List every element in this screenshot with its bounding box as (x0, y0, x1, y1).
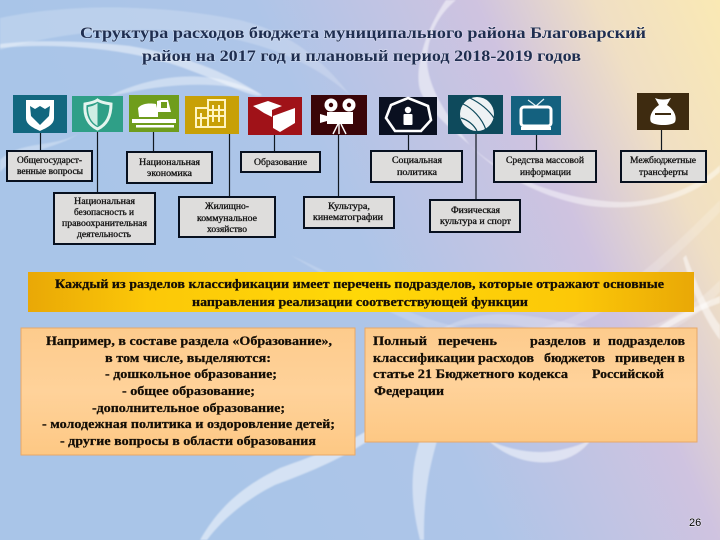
icon: film camera (311, 95, 367, 135)
panel: budget code reference: разделов (530, 334, 586, 348)
label: housing: коммунальное (197, 213, 257, 223)
icon: combine harvester (129, 95, 179, 132)
label: national economy: экономика (147, 168, 192, 178)
panel: education example: в том числе, выделяются: (105, 351, 271, 365)
label: sport: Физическая (451, 205, 500, 215)
connector lines (40, 130, 662, 199)
icon: emblem (13, 95, 67, 133)
panel: budget code reference (365, 328, 697, 442)
label: mass media (494, 151, 596, 182)
panel: budget code reference: перечень (438, 334, 497, 348)
label: national economy (127, 152, 212, 183)
label: education (241, 152, 320, 172)
label: sport: культура и спорт (440, 216, 511, 226)
label: housing: хозяйство (207, 224, 248, 234)
title: Структура расходов бюджета муниципального района Благоварский (80, 25, 646, 42)
panel: education example: - другие вопросы в области образования (60, 434, 316, 448)
icon: shield (72, 96, 123, 132)
panel: education example: -дополнительное образование; (92, 401, 285, 415)
label: interbudget transfers: трансферты (639, 167, 688, 177)
label: culture: кинематографии (313, 212, 383, 222)
label: national security: безопасность и (74, 207, 134, 217)
panel: budget code reference: в (678, 351, 685, 365)
label: education: Образование (254, 157, 307, 167)
label: culture (304, 197, 394, 228)
panel: budget code reference: Федерации (374, 384, 444, 398)
panel: budget code reference: статье 21 Бюджетного кодекса (373, 367, 569, 381)
label: interbudget transfers: Межбюджетные (630, 155, 696, 165)
panel: budget code reference: расходов (478, 351, 534, 365)
icon: television (511, 96, 561, 135)
icon: money bag (637, 93, 689, 130)
title (80, 25, 646, 65)
panel: budget code reference: приведен (615, 351, 675, 365)
label: national economy: Национальная (139, 157, 200, 167)
label: social policy: Социальная (392, 155, 442, 165)
label: social policy: политика (397, 167, 437, 177)
panel: education example: - молодежная политика и оздоровление детей; (42, 417, 335, 431)
label: general state issues (7, 151, 92, 181)
callout banner: Каждый из разделов классификации имеет перечень подразделов, которые отражают основные (55, 277, 665, 291)
title: район на 2017 год и плановый период 2018-2019 годов (142, 48, 581, 65)
label: national security: деятельность (77, 229, 131, 239)
panel: budget code reference: бюджетов (544, 351, 605, 365)
panel: budget code reference: Полный (373, 334, 427, 348)
label: general state issues: Общегосударст- (17, 155, 82, 165)
icon: graduation box (248, 97, 302, 135)
callout banner: направления реализации соответствующей функции (192, 295, 528, 309)
page number: 26 (689, 517, 701, 529)
icon: buildings (185, 96, 239, 134)
panel: budget code reference: Российской (592, 367, 664, 381)
panel: education example: Например, в составе раздела «Образование», (46, 334, 332, 348)
label: culture: Культура, (328, 201, 370, 211)
label: housing: Жилищно- (205, 201, 249, 211)
label: general state issues: венные вопросы (17, 166, 83, 176)
panel: education example (21, 328, 355, 455)
label: national security (54, 193, 155, 244)
label: national security: правоохранительная (62, 218, 147, 228)
panel: budget code reference: и (593, 334, 600, 348)
label: housing (179, 197, 275, 237)
panel: budget code reference: классификации (373, 351, 475, 365)
label: interbudget transfers (621, 151, 706, 182)
label: national security: Национальная (74, 196, 135, 206)
icon: basketball (448, 95, 503, 134)
panel: education example: - дошкольное образование; (105, 367, 277, 381)
label: mass media: информации (520, 167, 571, 177)
callout banner (28, 272, 694, 312)
panel: education example: - общее образование; (122, 384, 255, 398)
label: mass media: Средства массовой (506, 155, 584, 165)
icon: social person (379, 97, 437, 135)
label: sport (430, 200, 520, 232)
label: social policy (371, 151, 462, 182)
panel: budget code reference: подразделов (608, 334, 685, 348)
